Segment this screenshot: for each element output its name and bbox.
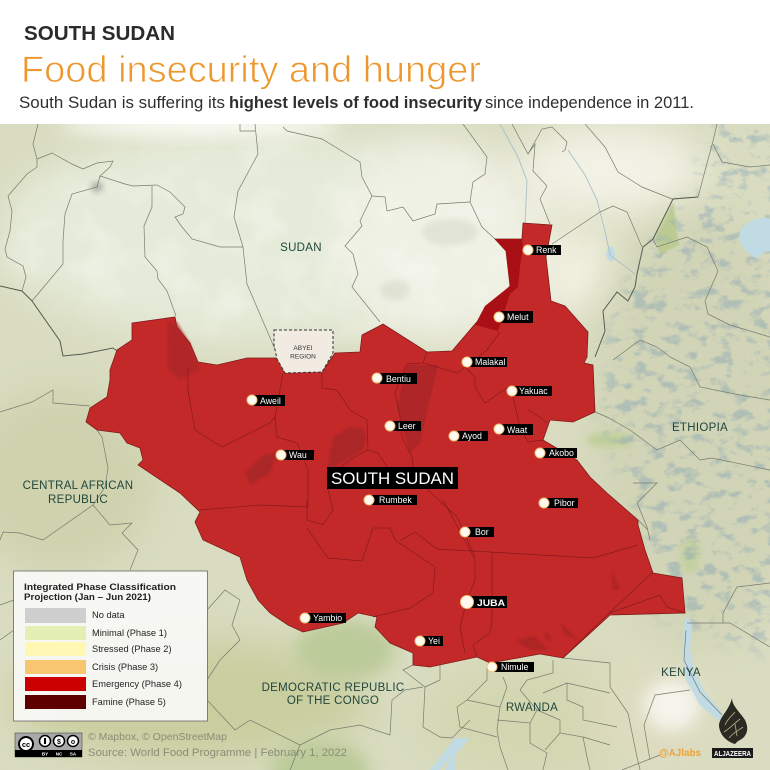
header — [0, 0, 770, 124]
Uganda and neighbours — [563, 658, 640, 770]
creative commons badge: cc — [22, 740, 30, 749]
legend labels: Stressed (Phase 2) — [92, 644, 172, 654]
city labels: Renk — [536, 245, 557, 255]
lakes — [430, 218, 770, 770]
city labels: Bor — [475, 527, 489, 537]
country labels — [23, 242, 728, 714]
country labels: KENYA — [661, 667, 701, 679]
city labels: Wau — [289, 450, 307, 460]
creative commons badge — [15, 733, 82, 757]
Abyei region — [274, 330, 333, 373]
darker patches — [167, 322, 200, 380]
city labels: Rumbek — [379, 495, 412, 505]
city labels: Akobo — [549, 448, 574, 458]
legend swatches — [25, 608, 86, 709]
legend labels: Emergency (Phase 4) — [92, 679, 182, 689]
city labels: SOUTH SUDAN — [331, 470, 454, 488]
logo calligraphy — [719, 698, 747, 744]
legend labels: No data — [92, 610, 125, 620]
legend title — [24, 582, 176, 602]
creative commons badge: $ — [57, 739, 61, 746]
South Sudan: emergency phase 4 area — [86, 223, 685, 667]
Abyei region: ABYEI — [293, 345, 313, 352]
credit: AJLabs: @AJlabs — [659, 747, 701, 759]
city labels: Bentiu — [386, 374, 411, 384]
creative commons badge: BY — [42, 752, 48, 756]
city labels: JUBA — [477, 598, 505, 609]
country labels: RWANDA — [506, 702, 558, 714]
city labels — [247, 245, 578, 672]
city labels: Yakuac — [519, 386, 548, 396]
city labels: Nimule — [501, 662, 528, 672]
legend labels: Famine (Phase 5) — [92, 697, 166, 707]
city labels: Aweil — [260, 396, 281, 406]
city labels: Yei — [428, 636, 440, 646]
legend title: Integrated Phase Classification — [24, 582, 176, 592]
title: country: SOUTH SUDAN — [24, 23, 175, 45]
subtitle: since independence in 2011. — [485, 93, 694, 112]
city labels: Ayod — [462, 431, 482, 441]
legend title: Projection (Jan – Jun 2021) — [24, 592, 151, 602]
country labels: ETHIOPIA — [672, 422, 728, 434]
city labels: Yambio — [313, 613, 342, 623]
subtitle: South Sudan is suffering its — [19, 93, 225, 112]
Abyei region: REGION — [290, 354, 316, 360]
legend labels — [92, 610, 182, 707]
city labels: Melut — [507, 312, 529, 322]
country labels: DEMOCRATIC REPUBLIC — [262, 682, 404, 694]
logo: Al Jazeera — [712, 698, 753, 758]
country labels: OF THE CONGO — [287, 695, 379, 707]
title: headline: Food insecurity and hunger — [21, 48, 481, 90]
source: Source: World Food Programme | February 1, 2022 — [88, 747, 347, 759]
legend — [14, 571, 208, 721]
internal state borders — [188, 332, 685, 658]
city labels: Waat — [507, 425, 528, 435]
subtitle: highest levels of food insecurity — [229, 93, 483, 112]
subtitle — [19, 93, 694, 112]
creative commons badge: NC — [56, 752, 63, 756]
terrain shadow in south — [515, 570, 620, 650]
attribution: © Mapbox, © OpenStreetMap — [88, 731, 227, 743]
city labels: Leer — [398, 421, 416, 431]
creative commons badge: o — [71, 739, 75, 746]
legend labels: Minimal (Phase 1) — [92, 628, 167, 638]
legend labels: Crisis (Phase 3) — [92, 662, 158, 672]
country labels: SUDAN — [280, 242, 322, 254]
city labels: Malakal — [475, 357, 505, 367]
country labels: CENTRAL AFRICAN — [23, 480, 133, 492]
city labels: Pibor — [554, 498, 575, 508]
country labels: REPUBLIC — [48, 494, 108, 506]
logo wordmark: ALJAZEERA — [714, 749, 751, 758]
creative commons badge: SA — [70, 752, 77, 756]
